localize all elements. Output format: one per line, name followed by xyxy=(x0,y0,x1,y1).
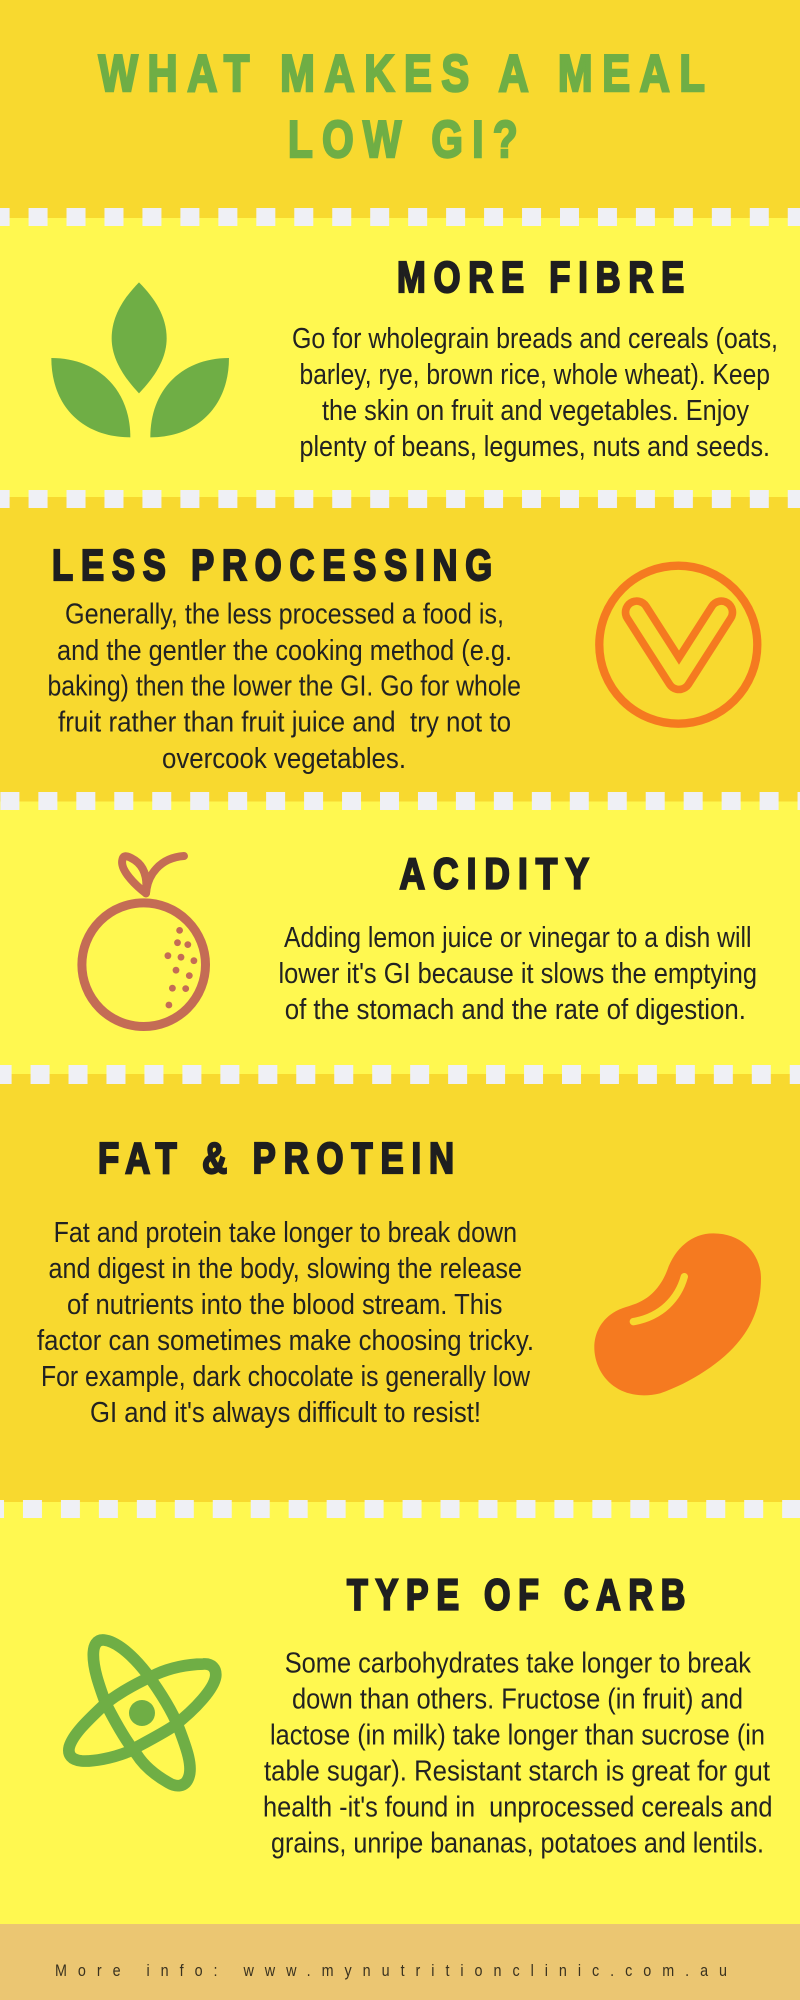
panel: footer xyxy=(0,1924,800,2000)
text block: fat and protein: factor can sometimes make choosing tricky. xyxy=(37,1325,534,1357)
text block: fat and protein: GI and it's always difficult to resist! xyxy=(90,1397,481,1429)
text block: less processing: baking) then the lower the GI. Go for whole xyxy=(48,670,521,702)
text block: less processing: and the gentler the cooking method (e.g. xyxy=(57,635,512,667)
icon: three green leaves xyxy=(51,282,229,437)
panel: more fibre xyxy=(0,218,800,497)
text block: fat and protein: For example, dark chocolate is generally low xyxy=(41,1361,531,1393)
icon: atom xyxy=(69,1640,216,1786)
text block: less processing: Generally, the less processed a food is, xyxy=(65,598,504,630)
heading: more fibre: MORE FIBRE xyxy=(397,253,692,302)
text block: fat and protein xyxy=(37,1217,534,1429)
text block: less processing xyxy=(48,598,521,775)
panel: type of carb xyxy=(0,1502,800,1924)
text block: type of carb xyxy=(263,1648,772,1860)
text block: fat and protein: of nutrients into the blood stream. This xyxy=(67,1289,502,1321)
text block: more fibre xyxy=(292,323,778,463)
heading: acidity: ACIDITY xyxy=(400,850,597,898)
icon: orange bean xyxy=(594,1233,761,1395)
icon: letter V in a circle xyxy=(599,566,757,724)
title: LOW GI? xyxy=(288,111,527,169)
text block: type of carb: down than others. Fructose (in fruit) and xyxy=(292,1684,743,1716)
text block: fat and protein: Fat and protein take longer to break down xyxy=(54,1217,517,1249)
icon: citrus fruit xyxy=(82,856,206,1026)
title xyxy=(98,45,714,169)
text block: less processing: overcook vegetables. xyxy=(162,743,406,775)
panel: less processing xyxy=(0,497,800,802)
heading: less processing: LESS PROCESSING xyxy=(52,541,500,590)
text block: less processing: fruit rather than fruit juice and try not to xyxy=(58,706,511,738)
panel: acidity xyxy=(0,802,800,1074)
heading: type of carb: TYPE OF CARB xyxy=(347,1570,693,1620)
panel: title header xyxy=(0,0,800,218)
text block: fat and protein: and digest in the body, slowing the release xyxy=(48,1253,522,1285)
text block: acidity xyxy=(278,922,757,1026)
heading: fat and protein: FAT & PROTEIN xyxy=(98,1134,462,1183)
panel: fat and protein xyxy=(0,1074,800,1502)
text block: acidity: of the stomach and the rate of digestion. xyxy=(285,994,746,1026)
text block: more fibre: the skin on fruit and vegetables. Enjoy xyxy=(322,395,749,427)
